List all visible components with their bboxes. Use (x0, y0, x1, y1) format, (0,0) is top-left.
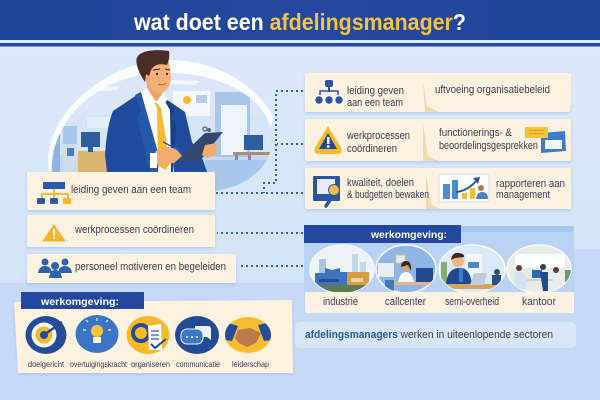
card: werkprocessen coördineren: werkprocessen coördineren (74, 224, 194, 236)
icon: documents (525, 127, 566, 153)
heading tag (21, 292, 144, 309)
caption strip: callcenter (385, 296, 426, 308)
icon: org chart (315, 80, 343, 104)
summary text strip (295, 322, 576, 348)
icon labels: leiderschap (232, 359, 269, 369)
hands (155, 147, 182, 165)
card: werkprocessen: werkprocessen (346, 130, 410, 142)
scene: industrie (310, 245, 374, 293)
card: leiding geven: aan een team (347, 97, 403, 109)
jacket (105, 93, 207, 172)
icon labels: organiseren (131, 359, 170, 369)
icon: people (38, 258, 72, 278)
card: werkprocessen: coördineren (347, 143, 397, 155)
heading tag (304, 225, 461, 243)
icon labels: communicatie (176, 359, 220, 369)
scene: semi-overheid (439, 245, 505, 293)
tie (154, 101, 170, 170)
card: kwaliteit en rapporteren: kwaliteit, doelen (347, 177, 414, 189)
clipboard (175, 132, 223, 162)
card: leiding geven aan een team: leiding geven aan een team (71, 184, 191, 196)
icon: handshake (224, 317, 272, 353)
card: werkprocessen (305, 119, 571, 161)
panel: competencies (14, 292, 293, 373)
lapels (135, 92, 159, 172)
collar (141, 88, 168, 108)
card: personeel motiveren (27, 254, 236, 283)
neck (147, 82, 163, 102)
card: kwaliteit en rapporteren: & budgetten bewaken (347, 189, 429, 201)
card: werkprocessen coördineren (27, 215, 215, 247)
card: kwaliteit en rapporteren: rapporteren aan (496, 178, 565, 190)
illustration: office oval with manager (48, 50, 275, 192)
scene: kantoor (507, 245, 571, 293)
card: werkprocessen: functionerings- & (439, 127, 513, 139)
caption strip (305, 292, 574, 313)
panel: right task cards (305, 73, 571, 209)
card: leiding geven: uftvoeing organisatiebeleid (435, 84, 550, 96)
caption strip: kantoor (522, 296, 556, 308)
panel: left task cards (27, 172, 236, 283)
card: leiding geven (305, 73, 571, 112)
dotted connector lines (216, 91, 303, 266)
panel: work environments (304, 225, 574, 313)
icon: warning triangle (43, 225, 65, 241)
head (148, 62, 171, 93)
card: werkprocessen: beoordelingsgesprekken (439, 140, 538, 152)
icon labels: overtuigingskracht (70, 359, 128, 369)
caption strip: industrie (323, 296, 358, 308)
card: leiding geven: leiding geven (347, 85, 404, 97)
heading tag: werkomgeving: (370, 229, 447, 241)
manager (105, 50, 223, 172)
summary text strip: afdelingsmanagers werken in uiteenlopende sectoren (305, 329, 553, 341)
icon: chart report (439, 174, 489, 202)
scene: callcenter (376, 245, 436, 293)
icon: warning (315, 128, 341, 153)
card: kwaliteit en rapporteren (305, 168, 571, 209)
icon labels (28, 359, 269, 369)
card: leiding geven aan een team (27, 172, 215, 210)
icon: hierarchy (37, 182, 71, 204)
icon: organising (126, 316, 170, 354)
icon labels: doelgericht (28, 359, 65, 369)
shirt (141, 90, 174, 172)
icon: target (26, 316, 66, 354)
caption strip: semi-overheid (445, 296, 499, 308)
title: wat doet een afdelingsmanager? (133, 9, 466, 35)
icon: magnifier on document (313, 176, 340, 206)
icon: speech bubbles (175, 316, 219, 354)
icon: light bulb (76, 315, 118, 353)
card: personeel motiveren: personeel motiveren en begeleiden (75, 261, 226, 273)
heading tag: werkomgeving: (40, 296, 119, 308)
header banner (0, 0, 600, 46)
card: kwaliteit en rapporteren: management (496, 189, 550, 201)
